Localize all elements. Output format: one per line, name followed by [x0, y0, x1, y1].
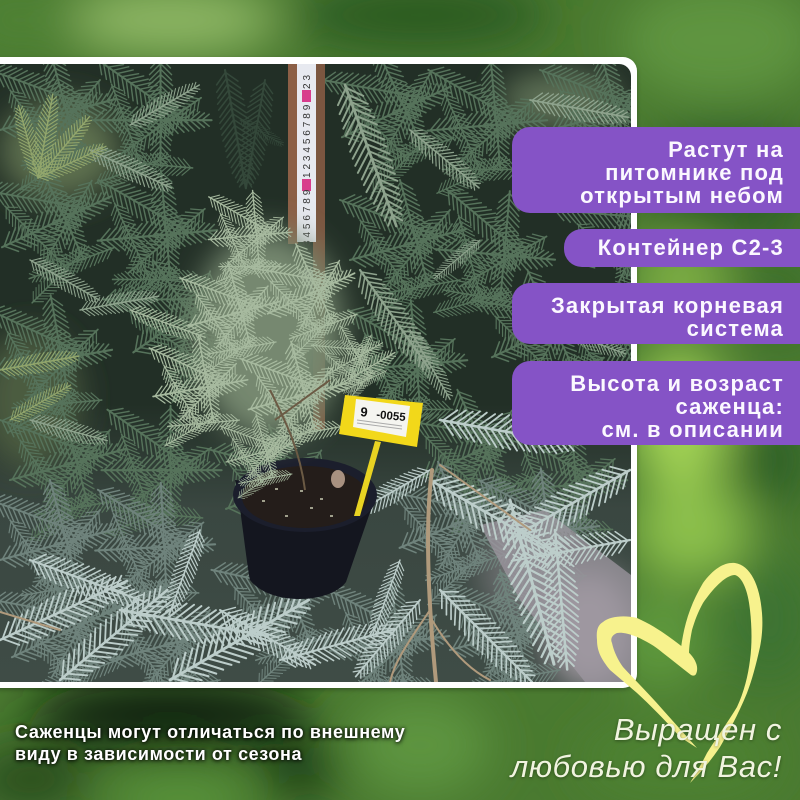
slogan: Выращен с — [614, 712, 782, 747]
black pot with soil — [233, 458, 377, 599]
photo: conifer branches with potted seedling — [0, 64, 631, 682]
yellow plant label: -0055 — [376, 409, 407, 424]
callout: height and age — [512, 361, 800, 445]
measuring stake and ruler: 3456789 — [302, 187, 313, 246]
callout: grown outdoors: открытым небом — [580, 183, 784, 208]
measuring stake and ruler: 123456 — [302, 284, 313, 335]
disclaimer note: виду в зависимости от сезона — [15, 744, 302, 764]
slogan: любовью для Вас! — [511, 749, 782, 784]
deep-shadow fronds behind the stake — [216, 69, 284, 190]
callout: container size: Контейнер С2-3 — [598, 235, 784, 260]
disclaimer note — [12, 722, 408, 768]
callout: grown outdoors: Растут на — [668, 137, 784, 162]
callout: height and age: см. в описании — [602, 417, 784, 442]
disclaimer note: Саженцы могут отличаться по внешнему — [15, 722, 405, 742]
weathered wood, bottom right — [480, 510, 631, 682]
callout: grown outdoors — [512, 127, 800, 213]
callout: height and age: саженца: — [675, 394, 784, 419]
lighter needle tips — [25, 77, 631, 450]
photo card — [0, 57, 637, 688]
silver upper fronds — [0, 403, 638, 697]
bare branch stems — [0, 465, 530, 682]
seedling: juniper foliage — [127, 180, 399, 503]
dark spruce layer — [0, 64, 631, 542]
callout: closed root system — [512, 283, 800, 344]
measuring stake and ruler: 23 — [302, 72, 313, 89]
callout: closed root system: Закрытая корневая — [551, 293, 784, 318]
callout: closed root system: система — [687, 316, 784, 341]
mid silver base, lower fronds — [0, 460, 600, 682]
measuring stake and ruler — [288, 64, 325, 430]
callout: height and age: Высота и возраст — [570, 371, 784, 396]
photo colour masses — [0, 70, 635, 690]
callout: container size — [564, 229, 800, 267]
yellow plant label: 9 — [360, 404, 368, 420]
measuring stake and ruler: 123456789 — [302, 102, 313, 178]
callout: grown outdoors: питомнике под — [605, 160, 784, 185]
slogan — [509, 712, 782, 784]
pine tuft — [0, 93, 110, 427]
yellow plant label — [339, 395, 423, 516]
